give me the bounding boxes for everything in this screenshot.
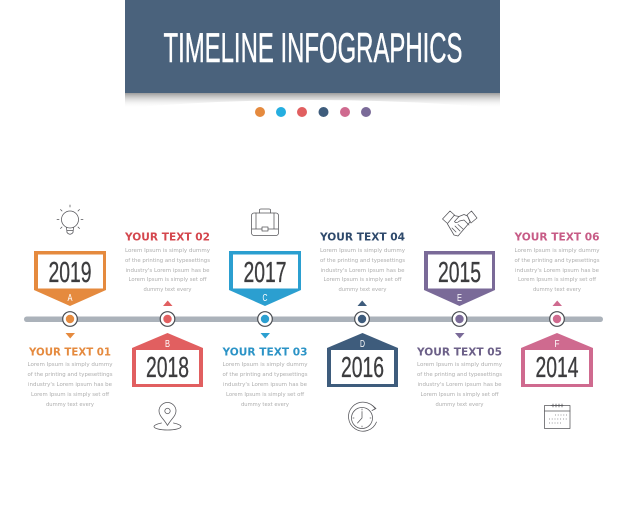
milestone C 2017: [229, 251, 301, 338]
text block 06: of the printing and typesettings: [514, 258, 600, 264]
text block 03: YOUR TEXT 03: [222, 346, 308, 358]
text block 06: YOUR TEXT 06: [514, 230, 600, 244]
milestone E 2015: [424, 251, 495, 338]
text block 02: dummy text every: [144, 287, 192, 293]
text block 04: [319, 230, 406, 293]
milestone B 2018: B: [165, 339, 170, 350]
text block 03: of the printing and typesettings: [222, 372, 308, 378]
text block 03: [222, 346, 308, 408]
text block 03: Lorem Ipsum is simply set off: [226, 392, 304, 398]
text block 05: industry's Lorem ipsum has be: [418, 382, 502, 388]
milestone A 2019: 2019: [48, 257, 92, 289]
text block 02: Lorem Ipsum is simply dummy: [125, 248, 211, 254]
milestone A 2019: A: [68, 293, 73, 304]
milestone B 2018: 2018: [146, 352, 189, 384]
text block 02: [124, 230, 211, 293]
text block 04: industry's Lorem ipsum has be: [320, 268, 405, 274]
icon: calendar: [544, 404, 570, 428]
text block 05: Lorem Ipsum is simply dummy: [417, 362, 503, 368]
text block 05: dummy text every: [436, 402, 484, 408]
text block 05: YOUR TEXT 05: [416, 346, 502, 358]
milestone E 2015: 2015: [438, 257, 481, 289]
text block 04: dummy text every: [338, 287, 387, 293]
text block 03: industry's Lorem ipsum has be: [223, 382, 308, 388]
text block 04: Lorem Ipsum is simply set off: [324, 277, 402, 283]
text block 01: industry's Lorem ipsum has be: [28, 382, 113, 388]
text block 04: Lorem Ipsum is simply dummy: [320, 248, 406, 254]
text block 05: of the printing and typesettings: [417, 372, 502, 378]
text block 01: of the printing and typesettings: [28, 372, 113, 378]
text block 06: dummy text every: [533, 287, 582, 293]
milestone F 2014: [521, 300, 593, 387]
milestone D 2016: D: [360, 339, 365, 350]
icon: clock: [349, 402, 376, 431]
text block 05: Lorem Ipsum is simply set off: [420, 392, 499, 398]
milestone D 2016: [327, 300, 398, 387]
text block 02: YOUR TEXT 02: [124, 230, 210, 244]
milestone E 2015: E: [457, 293, 462, 304]
header shadow: [125, 93, 500, 108]
milestone B 2018: [132, 300, 203, 387]
icon: handshake: [442, 211, 477, 236]
milestone D 2016: 2016: [341, 352, 384, 384]
text block 06: industry's Lorem ipsum has be: [515, 268, 600, 274]
text block 02: industry's Lorem ipsum has be: [126, 268, 210, 274]
icon: light bulb: [57, 205, 83, 234]
text block 03: dummy text every: [241, 402, 290, 408]
text block 01: dummy text every: [46, 402, 95, 408]
milestone A 2019: [34, 251, 106, 338]
title banner: [125, 0, 500, 93]
text block 01: YOUR TEXT 01: [28, 346, 111, 358]
text block 04: of the printing and typesettings: [320, 258, 405, 264]
text block 06: Lorem Ipsum is simply dummy: [514, 248, 600, 254]
text block 01: Lorem Ipsum is simply set off: [31, 392, 109, 398]
text block 04: YOUR TEXT 04: [319, 230, 405, 244]
milestone F 2014: 2014: [536, 352, 578, 384]
text block 06: Lorem Ipsum is simply set off: [518, 277, 596, 283]
milestone F 2014: F: [554, 339, 560, 350]
timeline bar: [24, 316, 603, 322]
milestone C 2017: 2017: [244, 257, 286, 289]
text block 02: of the printing and typesettings: [125, 258, 210, 264]
text block 01: Lorem Ipsum is simply dummy: [28, 362, 113, 368]
text block 02: Lorem Ipsum is simply set off: [128, 277, 207, 283]
text block 03: Lorem Ipsum is simply dummy: [222, 362, 308, 368]
color dots: [255, 107, 371, 117]
milestone C 2017: C: [262, 293, 268, 304]
icon: briefcase: [252, 209, 278, 236]
icon: map pin: [154, 402, 181, 430]
text block 01: [28, 346, 113, 408]
text block 06: [514, 230, 600, 293]
text block 05: [416, 346, 503, 408]
